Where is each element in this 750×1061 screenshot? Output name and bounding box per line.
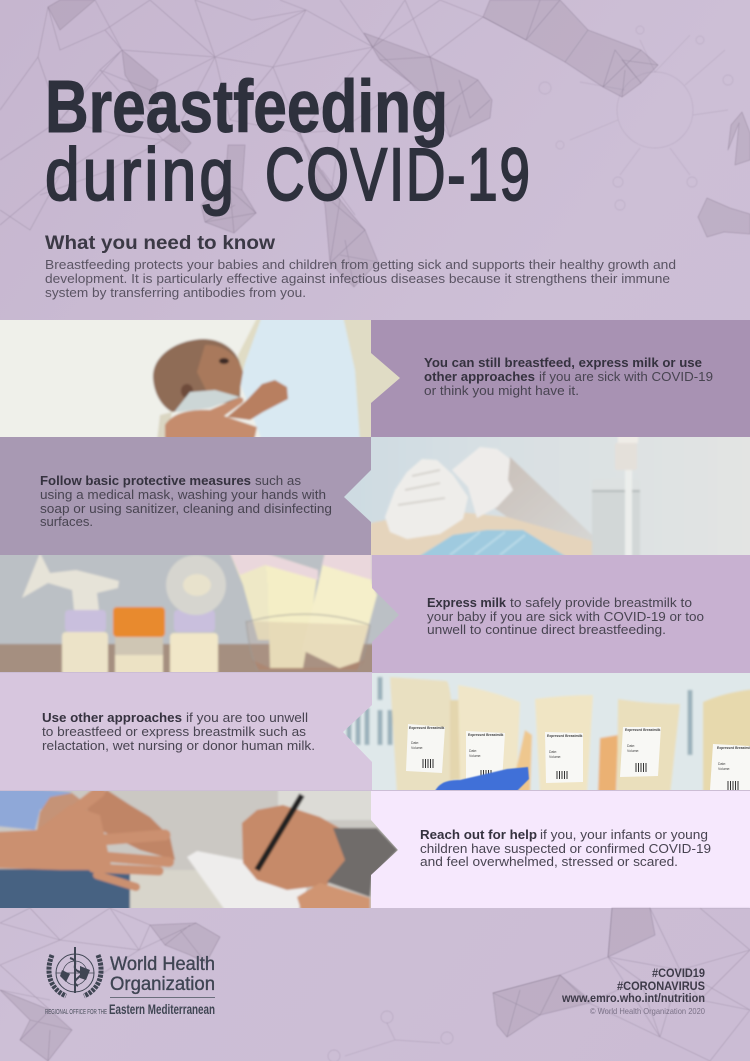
panel: protective measures text: such as (255, 473, 302, 488)
WHO logo (45, 947, 215, 1017)
photo: baby breastfeeding (0, 316, 406, 441)
panel: still breastfeed text: or think you might have it. (424, 383, 579, 398)
photo: labelled milk bags: Date: (469, 749, 477, 753)
panel: reach out text: children have suspected or confirmed COVID-19 (420, 841, 711, 856)
panel: protective measures text: using a medical mask, washing your hands with (40, 487, 326, 502)
photo: labelled milk bags: Volume: (627, 749, 639, 753)
photo: labelled milk bags: Volume: (469, 754, 481, 758)
panel: other approaches text (0, 673, 372, 790)
copyright: © World Health Organization 2020 (590, 1006, 705, 1016)
photo: labelled milk bags: Expressed Breastmilk (468, 733, 504, 737)
photo: masks and sanitizer (336, 433, 750, 559)
virus mesh: footer (0, 908, 750, 1061)
subheading: What you need to know (45, 233, 275, 254)
photo: labelled milk bags (336, 668, 750, 795)
hashtags and web address: #COVID19 (652, 968, 705, 980)
icon: WHO emblem (49, 947, 101, 996)
WHO logo: Organization (110, 974, 215, 995)
intro paragraph (45, 257, 676, 300)
panel: still breastfeed text: if you are sick with COVID-19 (539, 369, 713, 384)
panel: other approaches text: if you are too unwell (186, 710, 308, 725)
hashtags and web address: #CORONAVIRUS (617, 981, 705, 993)
panel: protective measures text (0, 437, 371, 555)
photo: labelled milk bags: Volume: (411, 746, 423, 750)
title (45, 65, 530, 216)
panel: express milk text: to safely provide breastmilk to (510, 595, 692, 610)
hashtags and web address (561, 968, 705, 1005)
title: COVID-19 (265, 133, 530, 216)
hashtags and web address: www.emro.who.int/nutrition (561, 993, 705, 1005)
panel: reach out text: if you, your infants or young (540, 827, 708, 842)
panel: express milk text: Express milk (427, 595, 507, 610)
photo: counselling session (0, 786, 406, 913)
WHO logo: REGIONAL OFFICE FOR THE (45, 1009, 107, 1016)
title: Breastfeeding (45, 65, 448, 148)
panel: express milk text: your baby if you are sick with COVID-19 or too (427, 609, 704, 624)
panel: protective measures text: surfaces. (40, 514, 93, 529)
WHO logo: Eastern Mediterranean (109, 1001, 215, 1017)
panel: other approaches text: relactation, wet nursing or donor human milk. (42, 738, 315, 753)
photo: labelled milk bags: Date: (411, 741, 419, 745)
panel: express milk text: unwell to continue direct breastfeeding. (427, 622, 666, 637)
panel: protective measures text: soap or using sanitizer, cleaning and disinfecting (40, 501, 332, 516)
panel: reach out text: Reach out for help (420, 827, 537, 842)
photo: labelled milk bags: Expressed Breastmilk (547, 734, 583, 738)
panel: reach out text: and feel overwhelmed, stressed or scared. (420, 854, 678, 869)
panel: express milk text (372, 555, 750, 673)
virus mesh: header (0, 0, 750, 287)
panel: still breastfeed text: You can still breastfeed, express milk or use (424, 355, 702, 370)
panel: protective measures text: Follow basic protective measures (40, 473, 251, 488)
WHO logo: World Health (110, 954, 215, 975)
photo: labelled milk bags: Expressed Breastmilk (409, 726, 445, 730)
intro paragraph: development. It is particularly effective against infectious diseases because it strengthens their immune (45, 271, 670, 286)
photo: labelled milk bags: Expressed Breastmilk (625, 728, 661, 732)
photo: labelled milk bags: Volume: (549, 755, 561, 759)
panel: still breastfeed text (371, 320, 750, 437)
photo: labelled milk bags: Date: (718, 762, 726, 766)
panel: reach out text (371, 791, 750, 908)
photo: labelled milk bags: Volume: (718, 767, 730, 771)
panel: other approaches text: to breastfeed or express breastmilk such as (42, 724, 307, 739)
title: during (45, 134, 234, 216)
photo: labelled milk bags: Date: (627, 744, 635, 748)
panel: still breastfeed text: other approaches (424, 369, 535, 384)
intro paragraph: Breastfeeding protects your babies and children from getting sick and supports their healthy growth and (45, 257, 676, 272)
photo: breast pumps and milk bags (0, 551, 406, 676)
intro paragraph: system by transferring antibodies from you. (45, 285, 306, 300)
photo: labelled milk bags: Date: (549, 750, 557, 754)
panel: other approaches text: Use other approaches (42, 710, 182, 725)
